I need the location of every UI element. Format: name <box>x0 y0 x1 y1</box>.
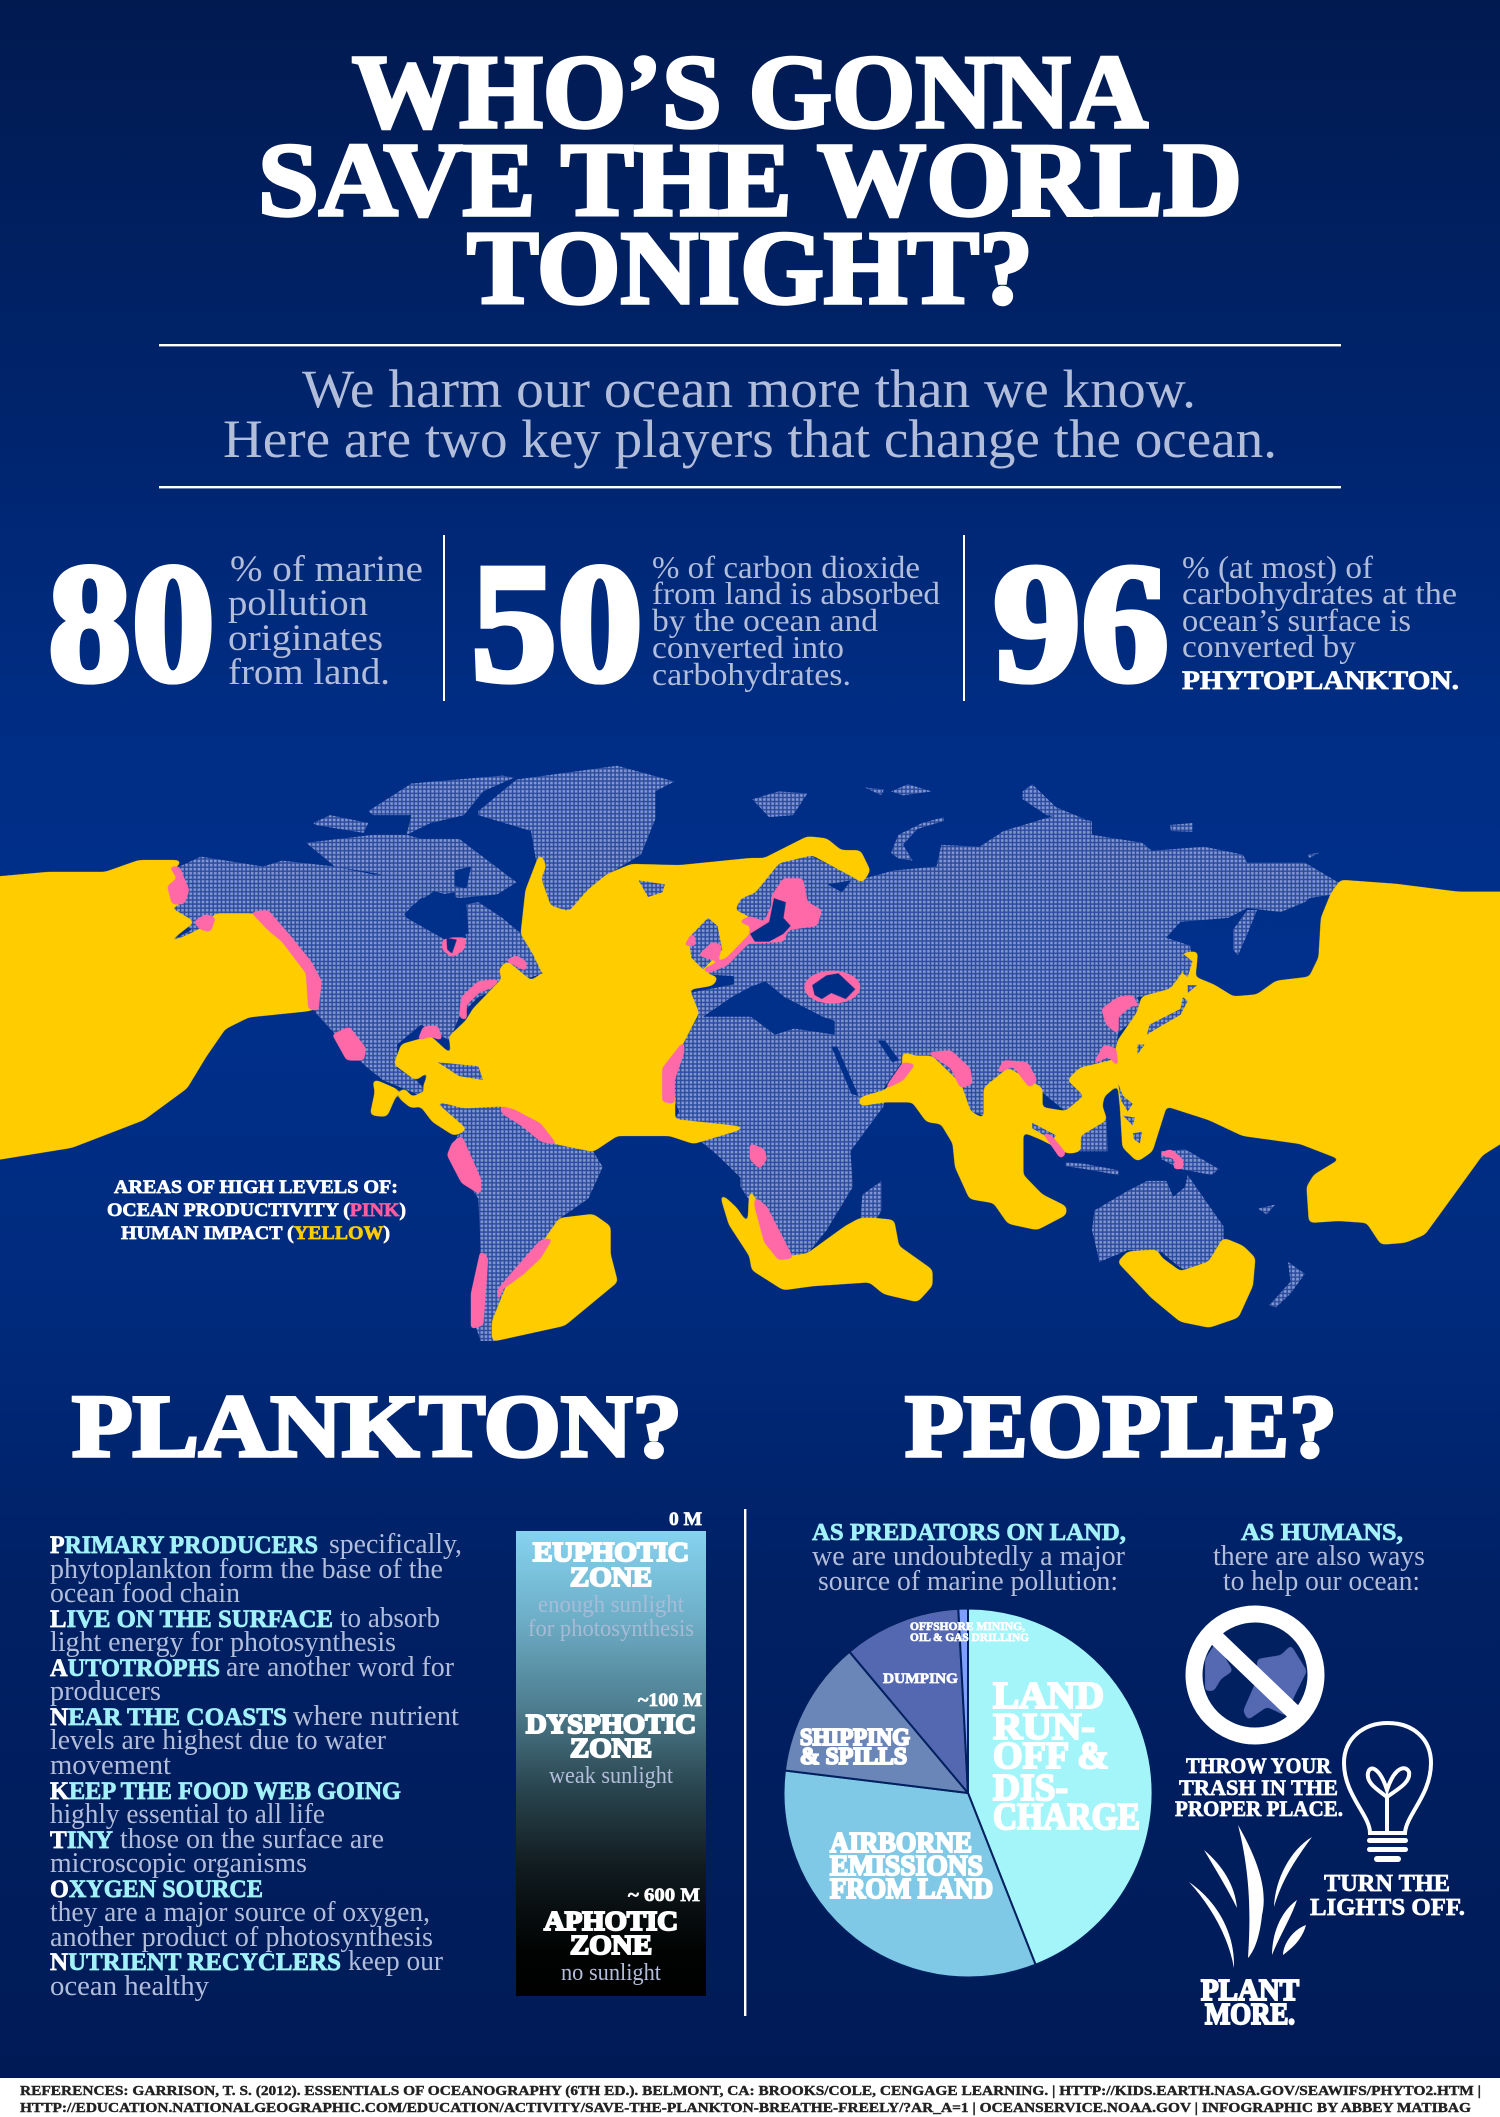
ocean zones column: APHOTIC <box>544 1906 678 1936</box>
pie label: shipping and spills: & SPILLS <box>800 1744 907 1770</box>
plankton facts: LIVE ON THE SURFACE <box>50 1606 333 1633</box>
pie label: airborne emissions: EMISSIONS <box>830 1851 983 1882</box>
subtitle with rules: Here are two key players that change the ocean. <box>223 409 1277 469</box>
pie label: land run-off: OFF & <box>993 1735 1109 1777</box>
plankton facts: to absorb <box>340 1603 440 1634</box>
plankton facts: ocean healthy <box>50 1971 209 2002</box>
heading: people: PEOPLE? <box>905 1378 1337 1476</box>
subtitle with rules: We harm our ocean more than we know. <box>302 359 1196 419</box>
stat: 96 percent: PHYTOPLANKTON. <box>1182 666 1459 695</box>
map legend: OCEAN PRODUCTIVITY ( PINK) <box>107 1200 406 1221</box>
dark seas inside pink <box>446 898 855 999</box>
pie label: land run-off: DIS- <box>993 1767 1068 1809</box>
ocean zones column: ~ 600 M <box>628 1885 700 1906</box>
humans intro: AS HUMANS, <box>1241 1520 1403 1546</box>
caption: lights off: LIGHTS OFF. <box>1310 1895 1465 1921</box>
plankton facts: KEEP THE FOOD WEB GOING <box>50 1778 401 1805</box>
pie label: airborne emissions <box>830 1828 993 1905</box>
ocean zones column: weak sunlight <box>549 1763 673 1789</box>
stat: 50 percent: % of carbon dioxide <box>652 549 920 585</box>
pie label: offshore mining <box>910 1621 1029 1644</box>
plankton facts: PRIMARY PRODUCERS <box>50 1532 318 1559</box>
references footer: REFERENCES: GARRISON, T. S. (2012). ESSENTIALS OF OCEANOGRAPHY (6TH ED.). BELMONT, CA: BROOKS/COLE, CENGAGE LEARNING. | HTTP://KIDS.EARTH.NASA.GOV/SEAWIFS/PHYTO2.HTM | <box>20 2084 1481 2099</box>
plankton facts: phytoplankton form the base of the <box>50 1554 443 1585</box>
plankton facts: AUTOTROPHS <box>50 1655 220 1682</box>
stat: 80 percent: % of marine <box>230 549 423 590</box>
pie label: land run-off <box>993 1675 1140 1838</box>
caption: throw trash: TRASH IN THE <box>1179 1775 1338 1800</box>
ocean zones column: ~100 M <box>638 1690 702 1711</box>
icon: no trash on earth <box>1194 1614 1316 1736</box>
ocean zones column: ZONE <box>570 1562 652 1592</box>
stat: 80 percent: 80 <box>48 529 215 717</box>
ocean zones column: EUPHOTIC <box>533 1537 689 1567</box>
plankton facts: producers <box>50 1676 161 1707</box>
stat: 96 percent: 96 <box>993 529 1169 717</box>
ocean zones column: ZONE <box>570 1733 652 1763</box>
plankton facts: another product of photosynthesis <box>50 1922 433 1953</box>
ocean zones column: enough sunlight <box>538 1592 684 1618</box>
stat: 80 percent: from land. <box>228 652 390 693</box>
plankton facts: those on the surface are <box>120 1824 384 1855</box>
pink: ocean productivity <box>167 867 1183 1329</box>
caption: throw trash <box>1175 1753 1343 1821</box>
heading: plankton: PLANKTON? <box>72 1378 682 1476</box>
title: WHO’S GONNA <box>352 33 1148 150</box>
plankton facts: levels are highest due to water <box>50 1725 387 1756</box>
ocean zones column: ZONE <box>570 1930 652 1960</box>
ocean zones column: for photosynthesis <box>528 1616 694 1642</box>
stat: 80 percent <box>48 529 423 717</box>
yellow: human impact <box>0 837 1500 1341</box>
humans intro: to help our ocean: <box>1223 1566 1420 1597</box>
plankton facts: OXYGEN SOURCE <box>50 1876 263 1903</box>
plankton facts: they are a major source of oxygen, <box>50 1897 430 1928</box>
stat: 80 percent: pollution <box>228 583 368 624</box>
pie label: land run-off: RUN- <box>993 1706 1095 1748</box>
plankton facts: ocean food chain <box>50 1578 240 1609</box>
pie label: dumping: DUMPING <box>883 1671 958 1687</box>
stat: 50 percent <box>471 529 940 717</box>
plankton facts: light energy for photosynthesis <box>50 1627 396 1658</box>
icon: plant <box>1189 1825 1312 1968</box>
map legend: AREAS OF HIGH LEVELS OF: <box>114 1177 398 1198</box>
pie label: offshore mining: OIL & GAS DRILLING <box>910 1632 1029 1644</box>
plankton facts: where nutrient <box>293 1701 459 1732</box>
caption: lights off: TURN THE <box>1324 1871 1450 1897</box>
pie label: land run-off: CHARGE <box>993 1796 1140 1838</box>
plankton facts: TINY <box>50 1827 113 1854</box>
predators intro: AS PREDATORS ON LAND, <box>812 1520 1126 1546</box>
pie label: shipping and spills <box>800 1725 910 1770</box>
pie label: shipping and spills: SHIPPING <box>800 1725 910 1751</box>
plankton facts: microscopic organisms <box>50 1848 307 1879</box>
humans intro: there are also ways <box>1213 1541 1425 1572</box>
ocean zones column: no sunlight <box>561 1960 661 1986</box>
caption: throw trash: PROPER PLACE. <box>1175 1796 1343 1821</box>
plankton facts <box>50 1529 462 2002</box>
stat: 50 percent: converted into <box>652 629 844 665</box>
world map <box>0 766 1500 1341</box>
plankton facts: movement <box>50 1750 171 1781</box>
ocean zones column <box>516 1509 706 1996</box>
title: SAVE THE WORLD <box>258 121 1242 238</box>
plankton facts: NUTRIENT RECYCLERS <box>50 1949 341 1976</box>
pie label: airborne emissions: FROM LAND <box>830 1874 993 1905</box>
caption: lights off <box>1310 1871 1465 1921</box>
stat: 96 percent: converted by <box>1182 628 1356 664</box>
caption: plant more <box>1201 1972 1299 2031</box>
pie label: offshore mining: OFFSHORE MINING, <box>910 1621 1025 1633</box>
map inland seas <box>404 867 899 1096</box>
references footer: HTTP://EDUCATION.NATIONALGEOGRAPHIC.COM/EDUCATION/ACTIVITY/SAVE-THE-PLANKTON-BREATHE-FREELY/?AR_A=1 | OCEANSERVICE.NOAA.GOV | INFOGRAPHIC BY ABBEY MATIBAG <box>20 2101 1471 2116</box>
title <box>258 33 1242 326</box>
title: TONIGHT? <box>467 209 1033 326</box>
stat: 50 percent: 50 <box>471 529 643 717</box>
pie label: land run-off: LAND <box>993 1675 1104 1717</box>
stat: 96 percent: ocean’s surface is <box>1182 602 1411 638</box>
plankton facts: specifically, <box>329 1529 462 1560</box>
predators intro: source of marine pollution: <box>818 1566 1118 1597</box>
ocean zones column: 0 M <box>669 1509 702 1530</box>
stat: 50 percent: carbohydrates. <box>652 656 851 692</box>
stat: 50 percent: from land is absorbed <box>652 575 940 611</box>
stat: 96 percent: % (at most) of <box>1182 549 1373 585</box>
caption: throw trash: THROW YOUR <box>1186 1753 1332 1778</box>
plankton facts: NEAR THE COASTS <box>50 1704 287 1731</box>
plankton facts: keep our <box>348 1946 444 1977</box>
stat: 80 percent: originates <box>228 618 383 659</box>
stat: 96 percent <box>993 529 1459 717</box>
caption: plant more: PLANT <box>1201 1972 1299 2007</box>
pie label: airborne emissions: AIRBORNE <box>830 1828 972 1859</box>
pie chart: sources of marine pollution <box>784 1608 1153 1978</box>
stat: 96 percent: carbohydrates at the <box>1182 575 1457 611</box>
predators intro: we are undoubtedly a major <box>812 1541 1126 1572</box>
references footer <box>0 2078 1500 2117</box>
predators intro <box>812 1520 1126 1597</box>
map land <box>160 766 1338 1341</box>
map legend: HUMAN IMPACT ( YELLOW) <box>121 1223 390 1244</box>
ocean zones column: DYSPHOTIC <box>526 1709 696 1739</box>
plankton facts: are another word for <box>226 1652 455 1683</box>
map legend <box>107 1177 406 1244</box>
islands over yellow <box>438 880 1197 1143</box>
stat: 50 percent: by the ocean and <box>652 602 878 638</box>
subtitle with rules <box>159 344 1341 488</box>
caption: plant more: MORE. <box>1205 1996 1295 2031</box>
humans intro <box>1213 1520 1425 1597</box>
plankton facts: highly essential to all life <box>50 1799 325 1830</box>
icon: light bulb <box>1344 1723 1431 1862</box>
